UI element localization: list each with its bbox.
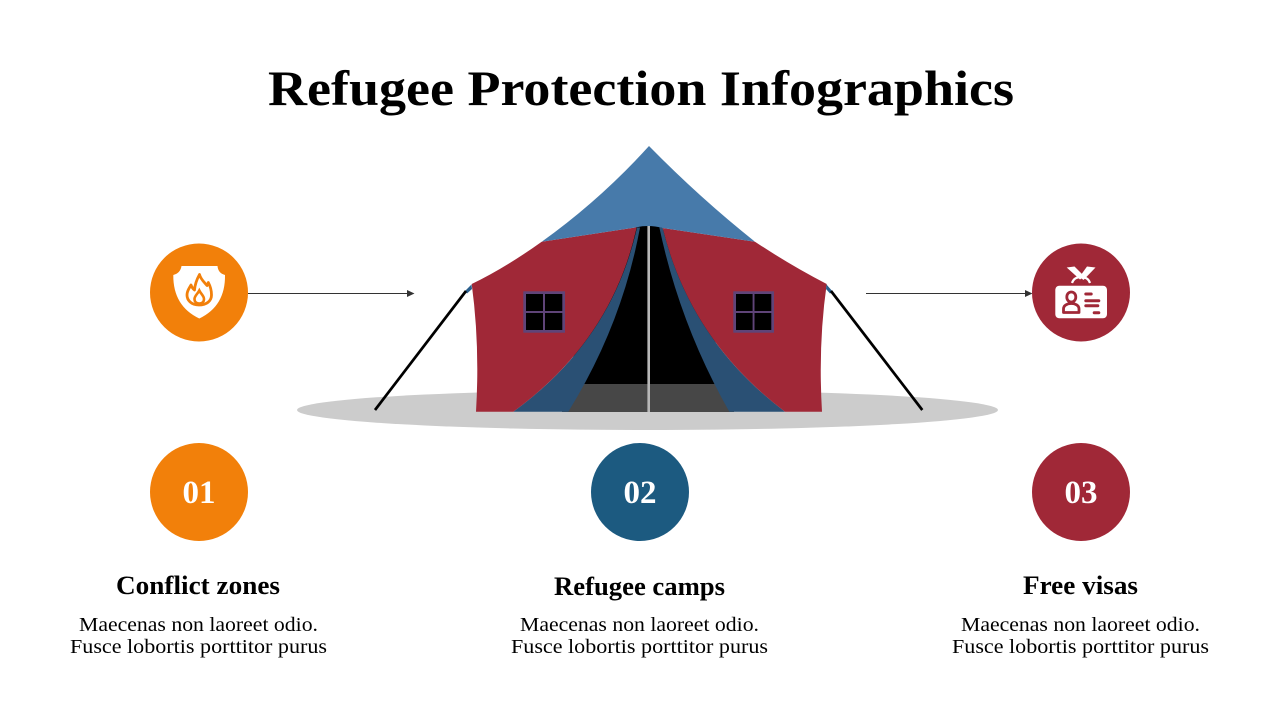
left window <box>523 291 565 333</box>
body text <box>70 614 327 658</box>
body text: Fusce lobortis porttitor purus <box>952 636 1209 658</box>
heading: Conflict zones <box>116 571 280 600</box>
left red wall <box>472 227 637 412</box>
title: Refugee Protection Infographics <box>268 60 1014 116</box>
card <box>1055 286 1107 318</box>
right guy rope <box>831 291 922 410</box>
body text: Fusce lobortis porttitor purus <box>511 636 768 658</box>
blue roof <box>542 146 755 242</box>
number badge 02 <box>591 443 689 541</box>
door floor <box>562 384 734 412</box>
column 3: free visas <box>952 443 1209 658</box>
right door flap <box>659 227 785 412</box>
heading: Free visas <box>1023 571 1138 600</box>
left guy rope <box>375 291 466 410</box>
left door flap <box>513 228 640 412</box>
icon: ID card with lanyard <box>1032 244 1130 342</box>
body text <box>952 614 1209 658</box>
right window <box>733 291 774 333</box>
center pole <box>647 226 650 412</box>
number badge 01 <box>150 443 248 541</box>
right red wall <box>663 228 827 412</box>
number badge 02: 02 <box>624 475 656 511</box>
arrow: tent to visa <box>866 290 1032 297</box>
arrow: conflict to tent <box>248 290 414 297</box>
body text: Fusce lobortis porttitor purus <box>70 636 327 658</box>
icon: fire shield <box>150 244 248 342</box>
number badge 03: 03 <box>1064 475 1098 511</box>
shield <box>173 266 225 318</box>
column 2: refugee camps <box>511 443 768 658</box>
number badge 01: 01 <box>182 475 216 511</box>
lanyard <box>1067 266 1096 283</box>
body text <box>511 614 768 658</box>
left rope tip <box>465 284 472 294</box>
column 1: conflict zones <box>70 443 327 658</box>
card lines <box>1084 292 1100 314</box>
number badge 03 <box>1032 443 1130 541</box>
illustration: tent <box>297 146 998 430</box>
body text: Maecenas non laoreet odio. <box>79 614 318 636</box>
tent door opening <box>560 226 735 384</box>
flame core <box>194 290 204 304</box>
body text: Maecenas non laoreet odio. <box>961 614 1200 636</box>
right rope tip <box>826 284 833 294</box>
body text: Maecenas non laoreet odio. <box>520 614 759 636</box>
ground shadow <box>297 390 998 430</box>
heading: Refugee camps <box>554 572 725 601</box>
person <box>1064 292 1079 312</box>
flame <box>187 274 212 305</box>
